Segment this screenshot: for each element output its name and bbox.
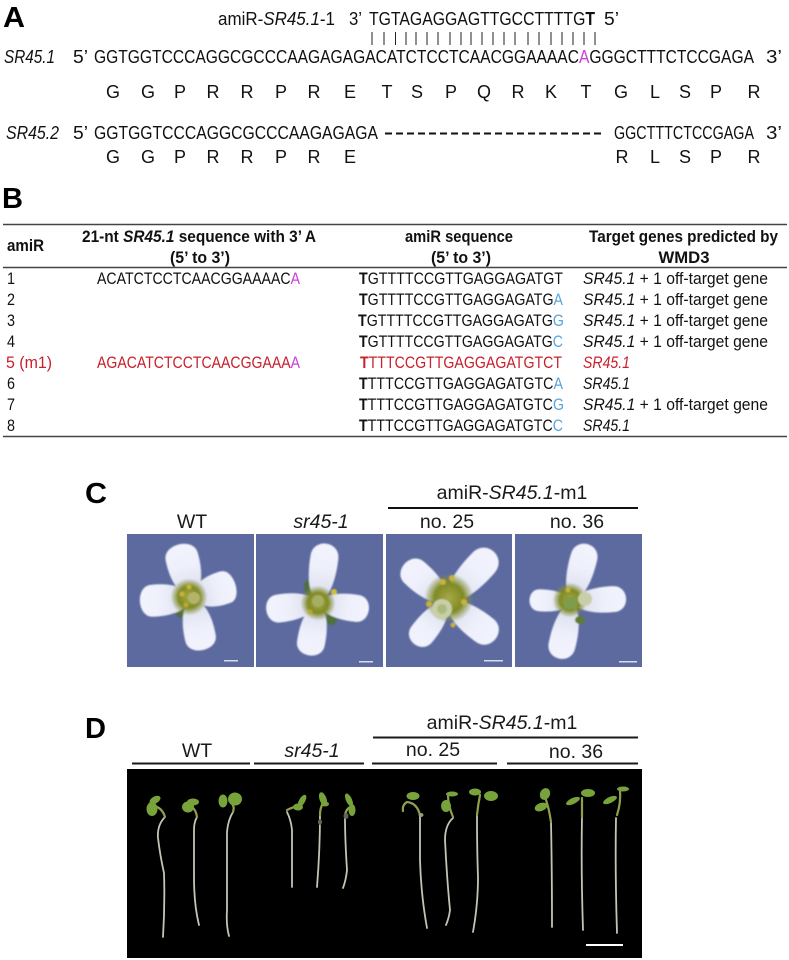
group brackets: [132, 738, 638, 764]
SR45.2 amino acids: R: [308, 147, 320, 167]
SR45.2 row: GGTGGTCCCAGGCGCCCAAGAGAGA: [94, 122, 379, 143]
SR45.2 amino acids: G: [141, 147, 155, 167]
SR45.2 row: 5’: [73, 122, 88, 143]
SR45.2 amino acids: L: [650, 147, 660, 167]
table header: WMD3: [658, 248, 710, 267]
row 6: [7, 374, 630, 393]
SR45.2 amino acids: R: [616, 147, 628, 167]
row 8: SR45.1: [583, 416, 630, 435]
SR45.1 amino acids: [106, 82, 760, 102]
panel C: flowers: [85, 478, 642, 667]
label WT: WT: [177, 511, 207, 533]
row 5 m1 highlighted: SR45.1: [583, 353, 630, 372]
flower photo sr45-1: [256, 534, 383, 667]
SR45.2 amino acids: E: [344, 147, 356, 167]
flower photo no. 25: [386, 534, 512, 667]
seedling WT 1: [146, 794, 165, 937]
SR45.2 amino acids: R: [206, 147, 220, 167]
SR45.1 amino acids: R: [512, 82, 524, 102]
row 4: SR45.1 + 1 off-target gene: [583, 332, 768, 351]
row 5 m1 highlighted: [6, 353, 630, 372]
amiR 3 prime sequence: 3’: [349, 8, 362, 29]
SR45.1 amino acids: P: [174, 82, 186, 102]
group label amiR-SR45.1-m1: amiR-SR45.1-m1: [437, 482, 587, 504]
row 4: TGTTTTCCGTTGAGGAGATGC: [359, 332, 563, 351]
row 4: [7, 332, 768, 351]
row 1: TGTTTTCCGTTGAGGAGATGT: [359, 269, 563, 288]
row 6: 6: [7, 374, 15, 393]
row 5 m1 highlighted: TTTTCCGTTGAGGAGATGTCT: [360, 353, 562, 372]
flower photo WT: [127, 534, 254, 667]
label no. 25: no. 25: [406, 739, 460, 761]
row 1: [7, 269, 768, 288]
SR45.1 amino acids: G: [106, 82, 120, 102]
seedling sr45-1 3: [343, 792, 356, 888]
SR45.1 row: GGTGGTCCCAGGCGCCCAAGAGAGACATCTCCTCAACGGAAAACAGGGCTTTCTCCGAGA: [94, 46, 755, 67]
SR45.2 row: [6, 122, 782, 143]
amiR label: amiR-SR45.1-1: [218, 8, 335, 29]
row 7: TTTTCCGTTGAGGAGATGTCG: [359, 395, 564, 414]
row 1: ACATCTCCTCAACGGAAAACA: [97, 269, 301, 288]
seedling no. 36 2: [565, 789, 595, 930]
table header: [7, 227, 778, 267]
panel letter A: A: [3, 2, 25, 34]
SR45.2 amino acids: P: [275, 147, 287, 167]
table header: (5’ to 3’): [170, 248, 230, 267]
SR45.1 amino acids: R: [240, 82, 254, 102]
row 7: SR45.1 + 1 off-target gene: [583, 395, 768, 414]
row 2: 2: [7, 290, 15, 309]
label no. 36: no. 36: [549, 741, 603, 763]
amiR 3 prime sequence: 5’: [604, 8, 619, 29]
panel letter B: B: [2, 183, 23, 215]
row 2: [7, 290, 768, 309]
row 7: 7: [7, 395, 15, 414]
panel B: amiR table: [2, 183, 787, 436]
SR45.2 amino acids: P: [710, 147, 722, 167]
SR45.1 row: 5’: [73, 46, 88, 67]
SR45.1 amino acids: G: [141, 82, 155, 102]
label sr45-1: sr45-1: [293, 511, 349, 533]
row 1: 1: [7, 269, 15, 288]
base pairing ticks: [372, 32, 595, 45]
SR45.2 amino acids: R: [748, 147, 760, 167]
SR45.2 row: SR45.2: [6, 122, 60, 143]
seedling sr45-1 2: [317, 791, 329, 887]
row 3: [7, 311, 768, 330]
seedling photo: [127, 769, 642, 958]
panel letter C: C: [85, 478, 107, 510]
row 2: SR45.1 + 1 off-target gene: [583, 290, 768, 309]
SR45.1 amino acids: K: [545, 82, 557, 102]
seedling WT 3: [218, 792, 242, 936]
flower photo no. 36: [515, 534, 642, 667]
SR45.1 amino acids: L: [650, 82, 660, 102]
table header: amiR: [7, 236, 44, 255]
SR45.2 amino acids: G: [106, 147, 120, 167]
SR45.1 row: SR45.1: [4, 46, 55, 67]
row 8: 8: [7, 416, 15, 435]
row 5 m1 highlighted: 5 (m1): [6, 353, 52, 372]
label no. 36: no. 36: [550, 511, 604, 533]
panel letter D: D: [85, 713, 106, 745]
row 7: [7, 395, 768, 414]
SR45.1 amino acids: R: [206, 82, 220, 102]
table rules: [3, 224, 787, 436]
seedling no. 25 1: [403, 792, 427, 928]
table header: 21-nt SR45.1 sequence with 3’ A: [82, 227, 316, 246]
seedling WT 2: [182, 798, 199, 925]
SR45.2 row: 3’: [766, 122, 782, 143]
row 3: TGTTTTCCGTTGAGGAGATGG: [358, 311, 564, 330]
SR45.2 amino acids: S: [679, 147, 691, 167]
SR45.2 amino acids: R: [240, 147, 254, 167]
SR45.1 amino acids: T: [580, 82, 592, 102]
row 2: TGTTTTCCGTTGAGGAGATGA: [359, 290, 564, 309]
table header: (5’ to 3’): [431, 248, 491, 267]
panel A: sequence alignment: [3, 2, 782, 167]
row 4: 4: [7, 332, 15, 351]
SR45.1 amino acids: E: [344, 82, 356, 102]
SR45.1 amino acids: P: [445, 82, 457, 102]
seedling no. 36 3: [602, 786, 629, 933]
row 8: TTTTCCGTTGAGGAGATGTCC: [359, 416, 563, 435]
SR45.1 amino acids: S: [411, 82, 423, 102]
SR45.1 amino acids: R: [308, 82, 320, 102]
label no. 25: no. 25: [420, 511, 474, 533]
SR45.1 amino acids: Q: [477, 82, 491, 102]
row 8: [7, 416, 630, 435]
seedling no. 36 1: [534, 786, 552, 927]
seedling sr45-1 1: [287, 793, 308, 887]
scale bar: [586, 944, 623, 946]
row 1: SR45.1 + 1 off-target gene: [583, 269, 768, 288]
group label amiR-SR45.1-m1: amiR-SR45.1-m1: [427, 712, 577, 734]
amiR 3 prime sequence: TGTAGAGGAGTTGCCTTTTGT: [369, 8, 596, 29]
table header: amiR sequence: [405, 227, 513, 246]
seedling no. 25 3: [469, 788, 498, 932]
SR45.1 amino acids: S: [679, 82, 691, 102]
row 5 m1 highlighted: AGACATCTCCTCAACGGAAAA: [97, 353, 301, 372]
label WT: WT: [182, 740, 212, 762]
SR45.1 amino acids: R: [748, 82, 760, 102]
row 6: SR45.1: [583, 374, 630, 393]
SR45.1 amino acids: P: [710, 82, 722, 102]
label sr45-1: sr45-1: [284, 740, 340, 762]
group line: [388, 507, 638, 509]
SR45.1 amino acids: G: [614, 82, 628, 102]
SR45.1 row: 3’: [766, 46, 782, 67]
seedling no. 25 2: [441, 792, 458, 925]
SR45.1 amino acids: P: [275, 82, 287, 102]
row 3: 3: [7, 311, 15, 330]
SR45.1 amino acids: T: [382, 82, 392, 102]
panel D: seedlings: [85, 712, 642, 958]
row 6: TTTTCCGTTGAGGAGATGTCA: [359, 374, 564, 393]
row 3: SR45.1 + 1 off-target gene: [583, 311, 768, 330]
SR45.2 amino acids: P: [174, 147, 186, 167]
SR45.2 amino acids: [106, 147, 760, 167]
